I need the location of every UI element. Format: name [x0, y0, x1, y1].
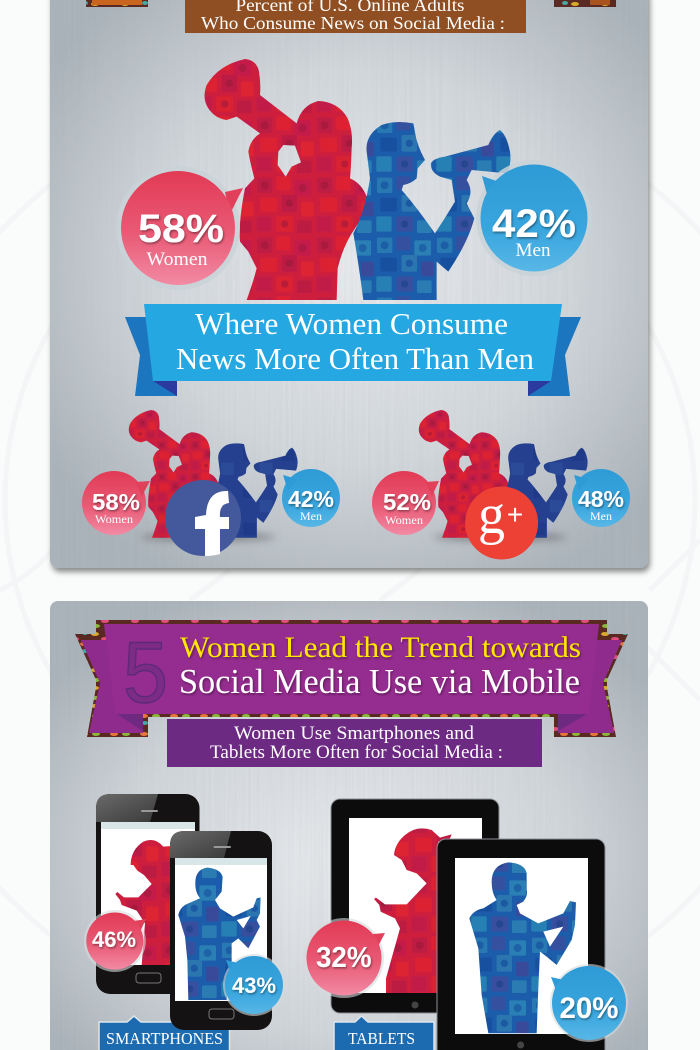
callout: 58% women: Women: [95, 514, 133, 526]
icon: Facebook: [165, 480, 241, 556]
small woman figure: [419, 410, 508, 538]
man silhouette: [469, 862, 576, 1033]
man silhouette: [178, 868, 261, 1000]
subtitle box: smartphones and tablets: Tablets More Often for Social Media :: [210, 742, 503, 763]
label: smartphones: SMARTPHONES: [106, 1029, 223, 1048]
callout: 42% men: [476, 160, 592, 276]
woman silhouette: [115, 840, 172, 965]
icon: Google Plus: +: [507, 499, 523, 530]
callout: 42% men: 42%: [492, 202, 576, 246]
woman silhouette: [374, 828, 452, 995]
callout: 42% men: Men: [300, 511, 322, 523]
chart: Facebook gender split: [82, 410, 340, 556]
callout: 58% women: 58%: [138, 207, 224, 251]
callout: 32%: 32%: [316, 942, 372, 974]
callout: 46%: 46%: [92, 927, 136, 952]
subtitle box: online adults: [185, 0, 526, 33]
callout: 58% women: [82, 471, 150, 535]
ribbon remnant left: [86, 0, 148, 7]
section number 5: 5: [123, 625, 168, 721]
subtitle box: smartphones and tablets: [167, 719, 542, 767]
figure: woman with megaphone: [205, 59, 367, 300]
ribbon remnant right: [554, 0, 616, 7]
callout: 52% women: Women: [385, 515, 423, 527]
device: tablet with woman: [331, 799, 499, 1013]
subtitle box: online adults: Who Consume News on Social Media :: [201, 13, 505, 33]
small man figure: [501, 443, 588, 538]
device: smartphone with man: [170, 831, 272, 1030]
panel: mobile social media use: [50, 601, 648, 1050]
callout: 48% men: 48%: [578, 486, 624, 512]
callout: 42% men: 42%: [288, 486, 334, 512]
banner: where women consume news: [125, 304, 581, 396]
banner: women lead the trend: [75, 620, 628, 737]
callout: 43%: [223, 954, 285, 1016]
callout: 58% women: [116, 166, 243, 290]
callout: 52% women: [372, 471, 439, 535]
small woman figure: [129, 410, 218, 538]
label: tablets: TABLETS: [348, 1029, 415, 1048]
label: smartphones: [99, 1016, 230, 1050]
banner: women lead the trend: Women Lead the Trend towards: [180, 631, 581, 664]
panel: social media news consumption: [50, 0, 648, 568]
callout: 42% men: [282, 469, 340, 527]
figure: man with megaphone: [353, 122, 510, 300]
icon: Google Plus: [465, 484, 538, 560]
banner: where women consume news: News More Often Than Men: [176, 341, 534, 376]
callout: 42% men: Men: [516, 240, 551, 261]
callout: 52% women: 52%: [383, 489, 431, 515]
banner: women lead the trend: Social Media Use via Mobile: [179, 662, 580, 701]
callout: 48% men: [572, 469, 630, 527]
device: tablet with man: [437, 839, 605, 1050]
callout: 20%: 20%: [560, 992, 618, 1025]
callout: 32%: [304, 918, 385, 998]
callout: 46%: [84, 910, 146, 972]
banner: where women consume news: Where Women Consume: [195, 306, 508, 341]
subtitle box: smartphones and tablets: Women Use Smartphones and: [234, 723, 475, 744]
device: smartphone with woman: [96, 794, 200, 994]
callout: 20%: [550, 964, 628, 1042]
icon: Google Plus: g: [478, 484, 505, 546]
small man figure: [211, 443, 298, 538]
callout: 58% women: 58%: [92, 489, 140, 515]
callout: 48% men: Men: [590, 511, 612, 523]
label: tablets: [334, 1016, 434, 1050]
callout: 58% women: Women: [146, 249, 208, 270]
callout: 43%: 43%: [232, 973, 276, 998]
chart: Google+ gender split: [372, 410, 630, 560]
